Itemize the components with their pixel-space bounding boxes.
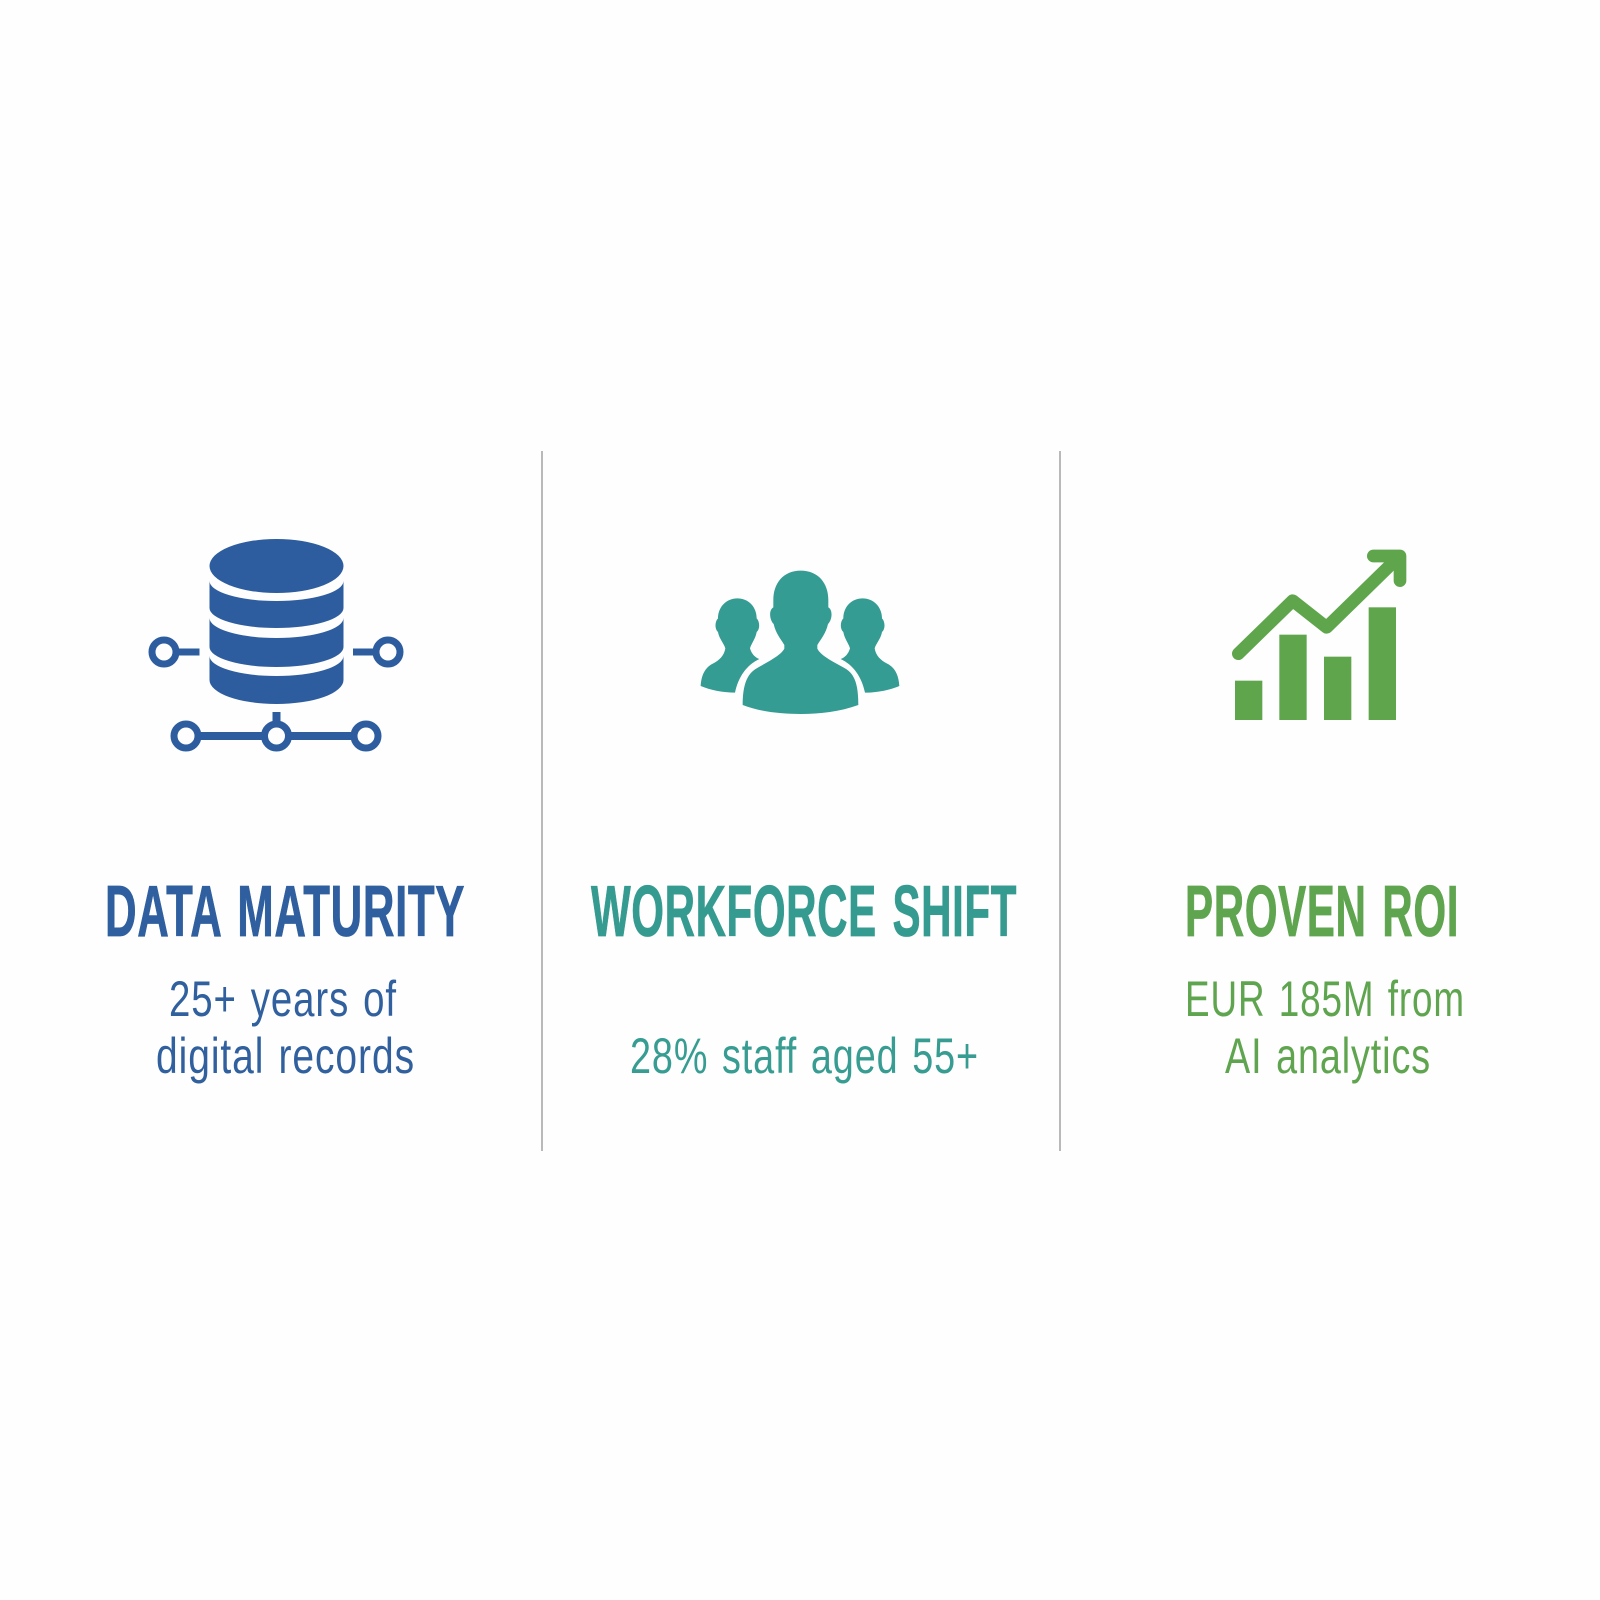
text: EUR 185M from AI analytics xyxy=(1185,971,1465,1084)
text: 25+ years of digital records xyxy=(156,971,415,1084)
icon: bar chart with rising arrow xyxy=(1235,556,1400,720)
panel: proven roi xyxy=(1185,556,1465,1084)
text: 25+ years of digital records: 25+ years of xyxy=(169,971,397,1027)
text: 28% staff aged 55+: 28% staff aged 55+ xyxy=(630,1028,979,1084)
heading: data maturity: DATA MATURITY xyxy=(105,872,465,952)
text: 25+ years of digital records: digital records xyxy=(156,1028,415,1084)
icon: database with network nodes xyxy=(152,539,400,748)
heading: workforce shift: WORKFORCE SHIFT xyxy=(591,872,1017,952)
text: EUR 185M from AI analytics: AI analytics xyxy=(1225,1028,1431,1084)
panel: data maturity xyxy=(105,539,465,1084)
icon: three people xyxy=(701,571,899,714)
panel: workforce shift xyxy=(591,571,1017,1084)
text: EUR 185M from AI analytics: EUR 185M from xyxy=(1185,971,1465,1027)
